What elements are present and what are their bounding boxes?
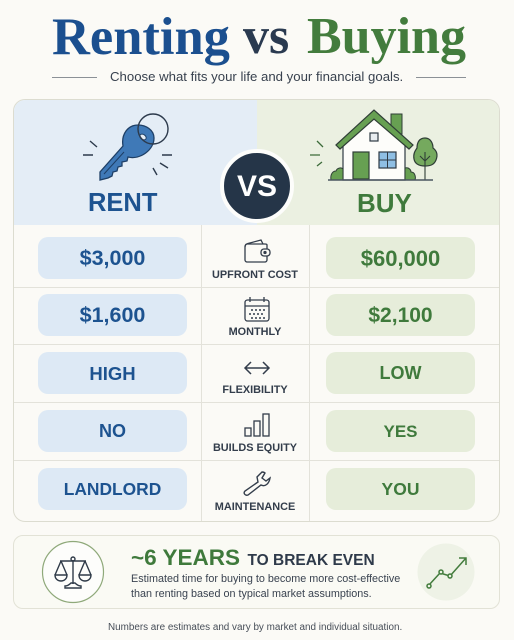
rent value: LANDLORD bbox=[64, 479, 161, 499]
icon: growth chart bbox=[418, 544, 474, 600]
rent value: $1,600 bbox=[80, 303, 145, 327]
label: monthly: MONTHLY bbox=[229, 326, 281, 338]
rent value bbox=[38, 294, 187, 336]
buy value bbox=[326, 294, 475, 336]
icon: bars bbox=[244, 413, 270, 437]
label: maintenance: MAINTENANCE bbox=[215, 501, 295, 513]
buy value bbox=[326, 352, 475, 394]
buy value: $60,000 bbox=[361, 246, 440, 271]
icon: arrows bbox=[244, 362, 270, 374]
title bbox=[52, 8, 466, 66]
rent value bbox=[38, 410, 187, 452]
panel: comparison table bbox=[13, 99, 500, 522]
row: maintenance bbox=[38, 468, 475, 510]
rent value: NO bbox=[99, 421, 126, 441]
row: builds equity bbox=[38, 410, 475, 452]
footnote: Numbers are estimates and vary by market and individual situation. bbox=[108, 622, 402, 633]
buy value: YES bbox=[383, 422, 418, 441]
panel header: buy bbox=[257, 100, 500, 225]
icon: calendar bbox=[244, 297, 270, 322]
title word: vs: vs bbox=[243, 8, 289, 65]
buy value bbox=[326, 237, 475, 279]
label: flexibility: FLEXIBILITY bbox=[222, 384, 288, 396]
callout heading: ~6 YEARS TO BREAK EVEN bbox=[131, 545, 375, 570]
callout text bbox=[131, 573, 400, 600]
buy value bbox=[326, 468, 475, 510]
buy value bbox=[326, 410, 475, 452]
panel header: rent bbox=[14, 100, 257, 225]
icon: key bbox=[83, 113, 172, 181]
row: flexibility bbox=[38, 352, 475, 394]
buy value: LOW bbox=[380, 363, 422, 383]
heading: rent: RENT bbox=[88, 189, 157, 217]
subtitle: Choose what fits your life and your financial goals. bbox=[110, 69, 403, 84]
icon: wallet bbox=[244, 239, 271, 263]
heading: buy: BUY bbox=[357, 188, 412, 218]
row: upfront cost bbox=[38, 237, 475, 279]
rent value: HIGH bbox=[89, 363, 136, 384]
row: monthly bbox=[38, 294, 475, 336]
callout text: than renting based on typical market assumptions. bbox=[131, 588, 372, 600]
callout text: Estimated time for buying to become more cost-effective bbox=[131, 573, 400, 585]
rent value bbox=[38, 237, 187, 279]
badge: VS: VS bbox=[237, 170, 277, 203]
icon: house bbox=[310, 109, 438, 181]
buy value: $2,100 bbox=[368, 304, 433, 327]
label: upfront cost: UPFRONT COST bbox=[212, 269, 298, 281]
label: builds equity: BUILDS EQUITY bbox=[213, 442, 297, 454]
icon: wrench bbox=[243, 471, 271, 496]
title word: Buying: Buying bbox=[307, 8, 466, 65]
rent value: $3,000 bbox=[80, 246, 145, 270]
rent value bbox=[38, 468, 187, 510]
buy value: YOU bbox=[382, 479, 419, 499]
icon: scales bbox=[42, 540, 104, 604]
title word: Renting: Renting bbox=[52, 8, 230, 66]
callout: break even bbox=[13, 535, 500, 609]
badge: VS bbox=[220, 149, 294, 223]
rent value bbox=[38, 352, 187, 394]
